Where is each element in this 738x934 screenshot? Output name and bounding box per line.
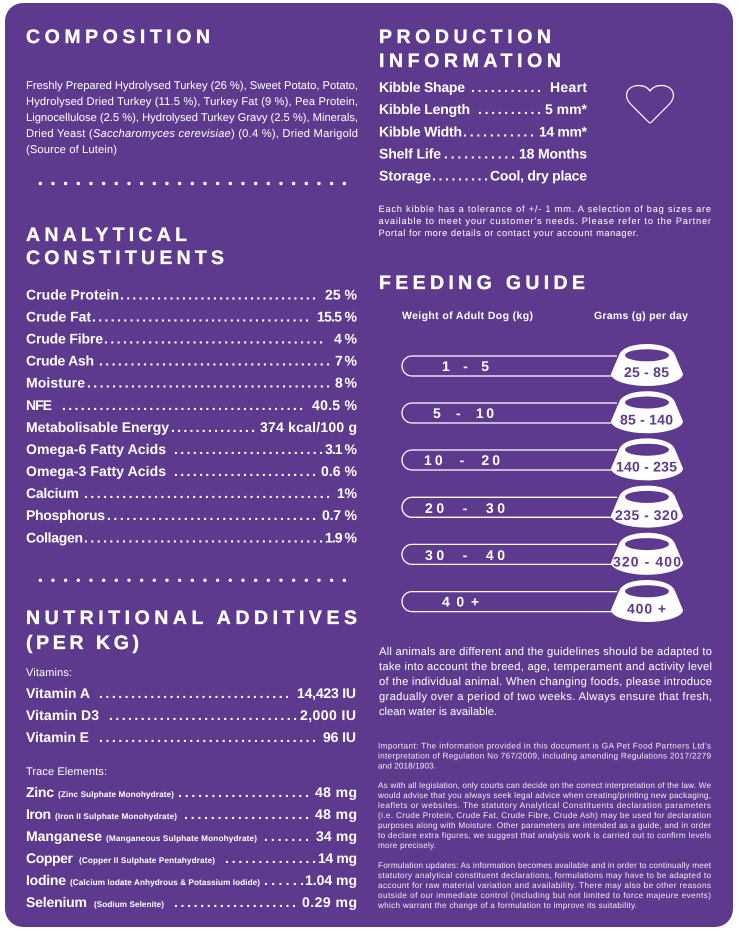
feeding row: 30 - 40: [402, 533, 683, 575]
row: collagen: ......................................: [84, 530, 323, 546]
row: kibble width: Kibble Width: [379, 124, 462, 140]
row: phosphorus: [26, 507, 358, 523]
row: crude ash: Crude Ash: [26, 352, 94, 368]
row: omega-3: 0.6 %: [321, 463, 358, 479]
row: collagen: Collagen: [26, 530, 83, 546]
row: moisture: 8 %: [335, 374, 358, 390]
row: kibble shape: [379, 79, 587, 95]
text block: feeding guidance: [379, 646, 712, 718]
row: omega-6: ........................: [174, 441, 323, 457]
text block: legislation note: [377, 781, 711, 850]
text block: formulation updates: [377, 861, 712, 910]
row: crude ash: [26, 352, 358, 368]
feeding row: 20 - 30: 235 - 320: [615, 507, 678, 523]
row: copper: Copper: [26, 850, 74, 866]
heading: production information: INFORMATION: [379, 50, 561, 72]
row: shelf life: 18 Months: [519, 146, 587, 162]
text block: kibble tolerance note: Each kibble has a tolerance of +/- 1 mm. A selection of bag sizes are: [378, 204, 711, 214]
row: vitamin e: 96 IU: [323, 729, 356, 745]
row: iron: Iron: [26, 806, 51, 822]
row: storage: .........: [432, 168, 488, 184]
row: selenium: (Sodium Selenite): [94, 900, 164, 909]
heading: analytical constituents: CONSTITUENTS: [26, 247, 224, 269]
row: omega-3: .......................: [174, 463, 316, 479]
column label: grams: Grams (g) per day: [594, 310, 688, 322]
row: vitamin a: [26, 685, 356, 701]
row: vitamin d3: [26, 707, 356, 723]
row: selenium: [26, 894, 357, 910]
row: crude protein: 25 %: [325, 286, 358, 302]
row: metabolisable energy: Metabolisable Energy: [26, 419, 169, 435]
row: shelf life: [379, 146, 587, 162]
row: omega-3: [26, 463, 358, 479]
row: phosphorus: Phosphorus: [26, 507, 105, 523]
row: vitamin a: ..............................: [99, 685, 289, 701]
row: crude protein: ................................: [120, 286, 316, 302]
row: storage: Cool, dry place: [490, 168, 587, 184]
row: zinc: Zinc: [26, 784, 54, 800]
feeding row: 5 - 10: [402, 391, 683, 433]
text block: composition ingredients: [26, 80, 358, 156]
table: vitamins: [26, 685, 356, 745]
row: kibble length: Kibble Length: [379, 101, 470, 117]
text block: formulation updates: account for raw material variation and availability. There may also be other reasons: [378, 881, 711, 890]
row: nfe: .......................................: [62, 397, 303, 413]
feeding row: 10 - 20: 10 - 20: [424, 452, 500, 468]
row: calcium: Calcium: [26, 485, 79, 501]
text block: important legal note: Important: The information provided in this document is GA Pet Food Partners Ltd's: [378, 742, 711, 750]
heading: feeding guide: FEEDING GUIDE: [379, 272, 585, 294]
row: iron: 48 mg: [315, 806, 357, 822]
row: calcium: 1 %: [337, 485, 358, 501]
feeding row: 40+: 40+: [442, 594, 479, 610]
text block: legislation note: more precisely.: [378, 841, 436, 850]
heading: nutritional additives: [26, 607, 357, 654]
row: vitamin a: 14,423 IU: [297, 685, 356, 701]
text block: composition ingredients: Freshly Prepared Hydrolysed Turkey (26 %), Sweet Potato, Potato,: [26, 80, 358, 92]
row: crude protein: Crude Protein: [26, 286, 119, 302]
row: kibble shape: ...........: [471, 79, 541, 95]
row: crude fibre: Crude Fibre: [26, 330, 103, 346]
row: manganese: Manganese: [26, 828, 102, 844]
text block: kibble tolerance note: Portal for more details or contact your account manager.: [378, 228, 638, 238]
feeding row: 20 - 30: 20 - 30: [425, 500, 505, 516]
feeding row: 5 - 10: 85 - 140: [620, 412, 673, 428]
text block: feeding guidance: of the individual animal. When changing foods, please introduce: [379, 676, 712, 688]
heading: analytical constituents: [26, 224, 224, 269]
row: iron: ...................: [184, 806, 309, 822]
row: kibble width: ...........: [463, 124, 534, 140]
row: zinc: 48 mg: [315, 784, 357, 800]
row: crude ash: .....................................: [99, 352, 330, 368]
text block: feeding guidance: clean water is available.: [379, 706, 497, 718]
row: kibble length: ..........: [478, 101, 541, 117]
row: calcium: .......................................: [84, 485, 330, 501]
row: manganese: 34 mg: [316, 828, 357, 844]
text block: composition ingredients: Hydrolysed Dried Turkey (11.5 %), Turkey Fat (9 %), Pea Protein,: [26, 96, 358, 108]
row: crude fat: ...................................: [92, 308, 309, 324]
row: vitamin d3: Vitamin D3: [26, 707, 99, 723]
text block: feeding guidance: gradually over a period of two weeks. Always ensure that fresh,: [379, 691, 712, 703]
text block: important legal note: and 2018/1903.: [378, 762, 436, 770]
row: kibble width: [379, 124, 588, 140]
text block: legislation note: purposes along with Moisture. Other parameters are intended as a guide, and in order: [378, 821, 711, 830]
row: zinc: (Zinc Sulphate Monohydrate): [58, 790, 174, 799]
row: metabolisable energy: 374 kcal/100 g: [260, 419, 357, 435]
feeding row: 30 - 40: 320 - 400: [613, 554, 681, 570]
row: manganese: [26, 828, 357, 844]
feeding row: 5 - 10: 5 - 10: [433, 405, 494, 421]
row: copper: 14 mg: [318, 850, 357, 866]
feeding row: 1 - 5: 1 - 5: [442, 358, 489, 374]
text block: legislation note: As with all legislation, only courts can decide on the correct interpretation of the law. We: [378, 781, 711, 790]
heading: production information: PRODUCTION: [379, 26, 551, 48]
row: metabolisable energy: ..............: [171, 419, 255, 435]
text block: kibble tolerance note: available to meet your customer's needs. Please refer to the Partner: [378, 216, 711, 226]
column label: weight: Weight of Adult Dog (kg): [402, 310, 533, 322]
subheading: trace elements: Trace Elements:: [26, 766, 107, 778]
feeding row: 10 - 20: [402, 438, 683, 480]
row: omega-6: [26, 441, 358, 457]
row: copper: [26, 850, 357, 866]
row: omega-6: 3.1 %: [325, 441, 358, 457]
row: vitamin d3: 2,000 IU: [300, 707, 356, 723]
feeding row: 40+: 400 +: [627, 600, 666, 616]
row: shelf life: Shelf Life: [379, 146, 441, 162]
text block: legislation note: leaflets or websites. The statutory Analytical Constituents declaration parameters: [378, 801, 711, 810]
text block: legislation note: to declare extra figures, we suggest that analysis work is carried out to confirm levels: [378, 831, 711, 840]
row: crude ash: 7 %: [335, 352, 358, 368]
row: vitamin d3: ..............................: [109, 707, 297, 723]
row: selenium: 0.29 mg: [302, 894, 357, 910]
row: vitamin e: ..................................: [99, 729, 316, 745]
row: phosphorus: .................................: [107, 507, 316, 523]
text block: legislation note: (i.e. Crude Protein, Crude Fat, Crude Fibre, Crude Ash) may be used for declaration: [378, 811, 711, 820]
row: copper: (Copper II Sulphate Pentahydrate): [79, 856, 215, 865]
row: zinc: [26, 784, 357, 800]
text block: composition ingredients: Lignocellulose (2.5 %), Hydrolysed Turkey Gravy (2.5 %), Minerals,: [26, 112, 358, 124]
feeding row: 40+: [402, 580, 683, 622]
row: nfe: NFE: [26, 397, 52, 413]
row: moisture: .......................................: [87, 374, 330, 390]
text block: composition ingredients: Dried Yeast (Saccharomyces cerevisiae) (0.4 %), Dried Marigold: [26, 128, 358, 140]
row: phosphorus: 0.7 %: [322, 507, 358, 523]
row: kibble length: 5 mm*: [545, 101, 588, 117]
heading: production information: [379, 26, 561, 72]
feeding row: 30 - 40: 30 - 40: [425, 547, 505, 563]
row: omega-6: Omega-6 Fatty Acids: [26, 441, 166, 457]
row: manganese: (Manganeous Sulphate Monohydrate): [106, 834, 257, 843]
row: iron: [26, 806, 357, 822]
row: vitamin e: [26, 729, 356, 745]
row: manganese: .......: [264, 828, 309, 844]
row: iodine: (Calcium Iodate Anhydrous & Potassium Iodide): [70, 878, 260, 887]
row: crude fat: [26, 308, 358, 324]
row: crude protein: [26, 286, 358, 302]
row: vitamin e: Vitamin E: [26, 729, 89, 745]
feeding row: 1 - 5: 25 - 85: [624, 364, 669, 380]
row: iron: (Iron II Sulphate Monohydrate): [55, 812, 177, 821]
row: iodine: ......: [264, 872, 304, 888]
row: crude fat: 15.5 %: [317, 308, 358, 324]
row: moisture: Moisture: [26, 374, 85, 390]
row: nfe: 40.5 %: [312, 397, 358, 413]
text block: formulation updates: which warrant the change of a formulation to improve its suitability.: [377, 901, 637, 910]
feeding row: 20 - 30: [402, 486, 683, 528]
text block: important legal note: [378, 742, 711, 770]
row: kibble width: 14 mm*: [539, 124, 588, 140]
text block: formulation updates: statutory analytical constituent declarations, formulations may have to be adapted to: [378, 871, 711, 880]
text block: feeding guidance: take into account the breed, age, temperament and activity level: [379, 661, 712, 673]
row: omega-3: Omega-3 Fatty Acids: [26, 463, 166, 479]
text block: legislation note: would advise that you always seek legal advice when creating/printing new packaging,: [377, 791, 711, 800]
row: selenium: ...................: [174, 894, 296, 910]
heading: nutritional additives: (PER KG): [26, 632, 139, 654]
text block: formulation updates: outside of our immediate control (including but not limited to force majeure events): [378, 891, 711, 900]
row: zinc: ....................: [178, 784, 309, 800]
row: kibble shape: Heart: [550, 79, 587, 95]
row: selenium: Selenium: [26, 894, 87, 910]
row: crude fibre: [26, 330, 358, 346]
row: iodine: [26, 872, 357, 888]
subheading: vitamins: Vitamins:: [26, 667, 72, 679]
table: analytical constituents: [26, 286, 358, 546]
row: crude fat: Crude Fat: [26, 308, 91, 324]
text block: feeding guidance: All animals are different and the guidelines should be adapted to: [379, 646, 712, 658]
text block: composition ingredients: (Source of Lutein): [26, 144, 117, 156]
row: collagen: 1.9 %: [325, 530, 358, 546]
row: crude fibre: 4 %: [334, 330, 358, 346]
feeding row: 10 - 20: 140 - 235: [616, 458, 677, 474]
row: vitamin a: Vitamin A: [26, 685, 90, 701]
row: shelf life: ...........: [444, 146, 515, 162]
icon: heart: [627, 86, 673, 123]
row: storage: Storage: [379, 168, 431, 184]
heading: analytical constituents: ANALYTICAL: [26, 224, 187, 246]
row: storage: [379, 168, 587, 184]
row: crude fibre: ...................................: [104, 330, 323, 346]
text block: important legal note: interpretation of Regulation No 767/2009, including amending Regulations 2017/2279: [378, 752, 711, 760]
row: iodine: 1.04 mg: [305, 872, 357, 888]
row: kibble length: [379, 101, 588, 117]
table: production information: [379, 79, 588, 184]
row: copper: ..............: [225, 850, 316, 866]
heading: composition: COMPOSITION: [26, 26, 210, 48]
row: iodine: Iodine: [26, 872, 66, 888]
heading: nutritional additives: NUTRITIONAL ADDITIVES: [26, 607, 357, 629]
table: trace elements: [26, 784, 357, 910]
row: kibble shape: Kibble Shape: [379, 79, 465, 95]
text block: formulation updates: Formulation updates: As information becomes available and in order to continually meet: [378, 861, 712, 870]
row: metabolisable energy: [26, 419, 357, 435]
text block: kibble tolerance note: [378, 204, 711, 238]
feeding row: 1 - 5: [402, 344, 683, 386]
